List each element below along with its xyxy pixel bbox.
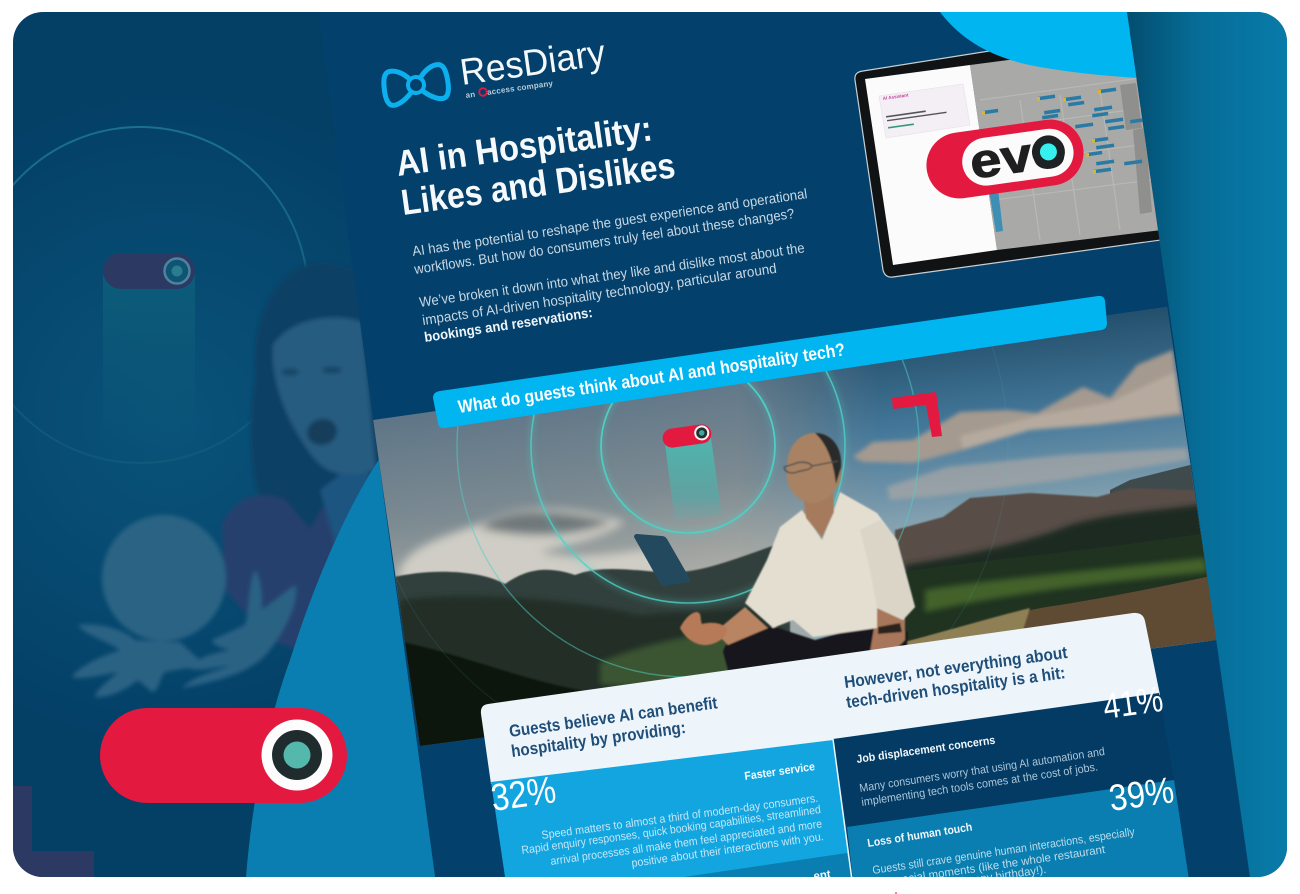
left column heading [508,693,719,761]
teal rings [368,126,1008,766]
column divider [833,739,852,880]
red corner accent [892,392,942,437]
evo cyan dot [1039,142,1058,161]
intro text: bookings and reservations: [423,304,594,345]
lower left box [684,853,852,877]
banner text: What do guests think about AI and hospitality tech? [457,339,846,417]
man hair [815,433,841,484]
man shirt [745,492,915,637]
card: faster service [488,740,852,883]
human touch text: on special moments (like the whole restaurant [874,844,1107,890]
39 percent: 39% [1106,769,1176,819]
man legs [723,622,908,685]
logo wordmark: ResDiary [457,32,608,93]
right hand [182,570,296,688]
tablet mockup [855,28,1175,277]
logo bowtie icon [382,64,450,106]
intro text: impacts of AI-driven hospitality technology, particular around [421,260,778,328]
evo ring [1030,133,1067,171]
tiny pink mark [895,892,897,894]
schedule dark blocks [1120,83,1152,214]
woman face [273,317,376,475]
brown foreground [905,575,1225,680]
ghost corner bracket [13,786,94,877]
job displacement box [833,693,1174,827]
tablet body [855,28,1175,277]
job displacement heading: Job displacement concerns [856,735,996,766]
faster service text: positive about their interactions with you. [631,831,825,870]
man left forearm [715,607,768,645]
left valley [395,596,780,760]
faster service text: arrival processes all make them feel appreciated and more [550,818,823,868]
human touch text: Guests still crave genuine human interactions, especially [872,826,1136,877]
intro text: AI has the potential to reshape the guest experience and operational [411,185,808,259]
schedule chip tips [982,90,1101,174]
left column heading: Guests believe AI can benefit [508,693,719,741]
right column heading: tech-driven hospitality is a hit: [845,663,1066,712]
intro text [411,185,808,345]
page: tilted infographic [318,12,1250,894]
41 percent: 41% [1100,678,1166,727]
human touch box [847,780,1189,880]
panel white header [481,613,1160,784]
back right ridge [1110,460,1225,520]
floating phone [634,534,690,586]
tablet white panel [865,65,997,265]
faster service text: Rapid enquiry responses, quick booking capabilities, streamlined [521,804,822,857]
hero photo [360,126,1230,766]
schedule booking chips [982,87,1146,173]
toggle white knob [262,720,332,790]
ghost toggle and beam [103,253,195,346]
ghost woman [72,262,400,697]
sky [360,290,1230,760]
woman body [221,491,336,649]
distant left hills [390,540,790,700]
assistant card [879,84,970,138]
toggle dark ring [272,730,322,780]
title [398,120,674,215]
32 percent: 32% [488,769,559,820]
page background [353,240,1250,877]
large red toggle [100,708,347,803]
woman hair [250,264,378,528]
toggle teal dot [284,742,310,768]
schedule grid rows [980,76,1166,240]
tablet grey schedule [970,42,1170,250]
toggle body [100,708,347,803]
card: loss of human touch [847,769,1189,894]
title: Likes and Dislikes [398,144,677,223]
logo sub-line: an access company [465,79,554,100]
mini toggle [661,423,713,449]
intro text: We’ve broken it down into what they like and dislike most about the [418,239,806,310]
meditating man [680,433,915,685]
title: AI in Hospitality: [393,107,655,184]
evo wordmark: evo [967,124,1069,190]
right gradient strip [1125,12,1287,877]
logo [381,45,604,108]
human touch text [872,826,1136,894]
assistant lines [886,110,947,129]
man left hand [680,612,727,645]
ghost ring [0,127,308,463]
question banner [433,296,1107,428]
right valley [900,530,1225,660]
right mountains [895,480,1230,640]
woman eyes [281,366,342,376]
evo red pill [922,115,1088,203]
clipped lower heading: ent [813,869,832,883]
right column heading [843,643,1069,712]
intro text: workflows. But how do consumers truly feel about these changes? [412,205,796,277]
man shirt shading [860,520,915,620]
blue curved wedge [246,458,445,877]
woman shirt [320,472,370,542]
card: job displacement [833,678,1174,827]
right cloud band upper [853,350,1188,500]
evo badge [922,115,1088,203]
left column heading: hospitality by providing: [510,718,687,761]
cyan corner shape [940,12,1140,78]
job displacement text: Many consumers worry that using AI automation and [859,746,1106,795]
human touch heading: Loss of human touch [867,822,973,850]
woman mouth [306,418,338,446]
right sky [360,290,1230,760]
bubble [102,515,226,641]
right column heading: However, not everything about [843,643,1069,692]
man right forearm [870,606,905,652]
left clouds [398,509,660,595]
right mountain shadow [905,500,1225,590]
left hand [72,624,205,697]
faster service box [491,740,852,877]
banner bar [433,296,1107,428]
teal beam [665,438,722,522]
assistant label: AI Assistant [882,92,909,101]
schedule blue column [990,193,1003,232]
faster service heading: Faster service [744,761,816,783]
man neck [803,488,834,538]
comparison panel [481,613,1189,894]
dark foreground hill [400,642,600,760]
man head [787,433,841,503]
man glasses [784,461,838,473]
access ring icon [479,88,487,96]
faster service text [521,793,825,870]
man watch [878,623,902,634]
job displacement text: implementing tech tools comes at the cost of jobs. [861,761,1099,809]
faster service text: Speed matters to almost a third of modern-day consumers. [541,793,819,842]
evo white pill [959,126,1077,189]
human touch text: singing happy birthday!). [922,864,1047,894]
